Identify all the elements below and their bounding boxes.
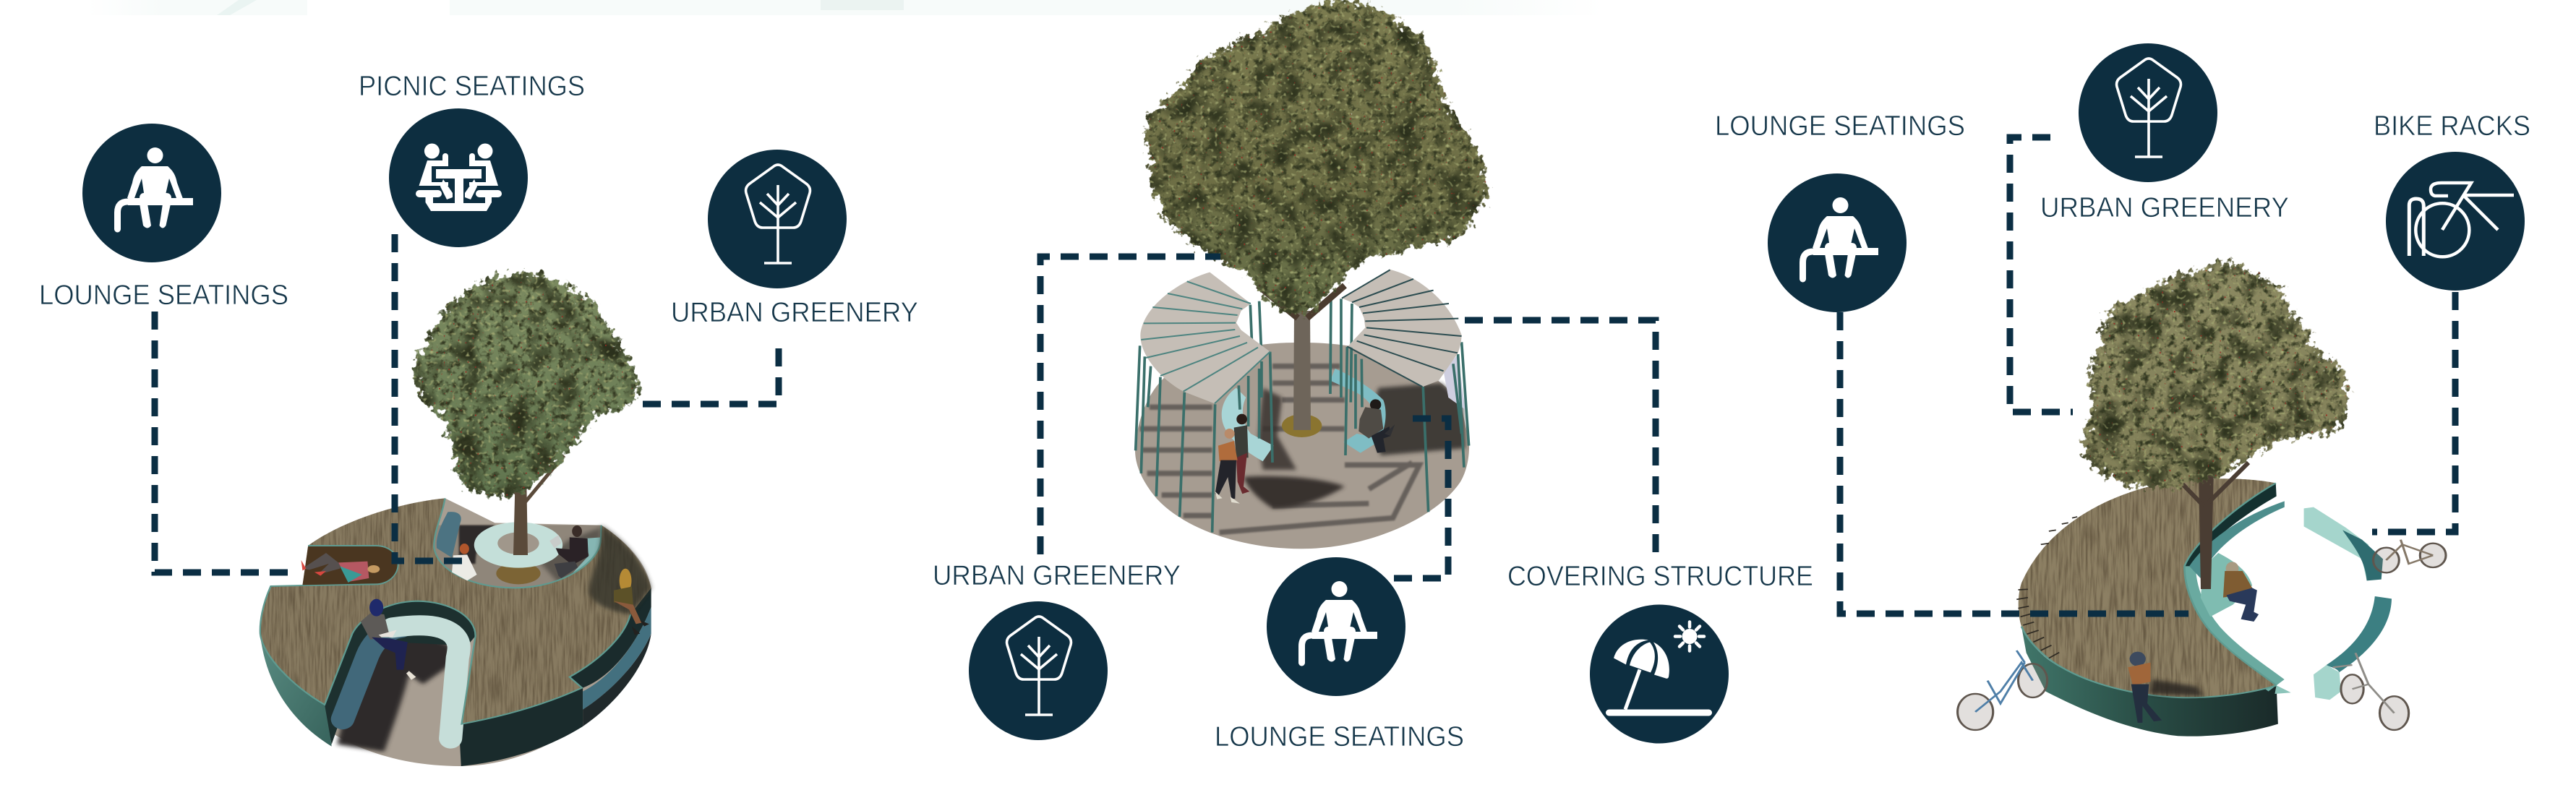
panel: circular deck with picnic pocket (260, 273, 651, 766)
label: covering structure: COVERING STRUCTURE (1507, 561, 1813, 592)
platform: floor, shadows, benches and canopy (1135, 270, 1469, 549)
tree: greenery A (411, 273, 641, 555)
faded top strip (87, 0, 1605, 15)
label: lounge seatings A: LOUNGE SEATINGS (39, 280, 288, 311)
connector: bike racks (2372, 292, 2455, 532)
people on deck A (301, 525, 649, 680)
icon: urban greenery C (2079, 43, 2217, 182)
icon: urban greenery A (708, 150, 847, 288)
connector: covering structure (1465, 320, 1656, 554)
connector: lounge B (1394, 418, 1448, 578)
label: bike racks: BIKE RACKS (2374, 111, 2530, 142)
platform: wood deck with benches (260, 498, 651, 766)
label: picnic seatings: PICNIC SEATINGS (359, 71, 585, 102)
connector: greenery A (636, 348, 779, 404)
connector: greenery B (1040, 257, 1220, 554)
people and bikes on crescent deck (1958, 540, 2446, 730)
icon: picnic seating (389, 108, 528, 247)
connector: lounge C (1840, 312, 2188, 614)
people in walkway (1215, 399, 1395, 504)
label: urban greenery A: URBAN GREENERY (671, 297, 918, 328)
panel: crescent deck with bike racks (1958, 262, 2446, 737)
panel: covered walkway (1135, 0, 1487, 549)
icon: bike rack (2386, 152, 2525, 291)
tree: greenery C (2079, 262, 2349, 589)
platform: crescent deck, walls and rack benches (2016, 478, 2392, 737)
connector: picnic A (395, 234, 468, 561)
icon: lounge seating C (1768, 173, 1907, 312)
icon: lounge seating B (1267, 557, 1405, 696)
icon: urban greenery B (969, 601, 1108, 740)
label: urban greenery B: URBAN GREENERY (933, 560, 1181, 591)
icon: covering structure umbrella (1590, 604, 1729, 743)
label: lounge seatings B: LOUNGE SEATINGS (1215, 721, 1464, 752)
connector: greenery C (2010, 137, 2073, 412)
tree: greenery B (1145, 0, 1487, 430)
connector: lounge A (155, 312, 298, 572)
icon: lounge seating A (82, 124, 221, 262)
label: lounge seatings C: LOUNGE SEATINGS (1715, 111, 1965, 142)
label: urban greenery C: URBAN GREENERY (2040, 192, 2289, 223)
